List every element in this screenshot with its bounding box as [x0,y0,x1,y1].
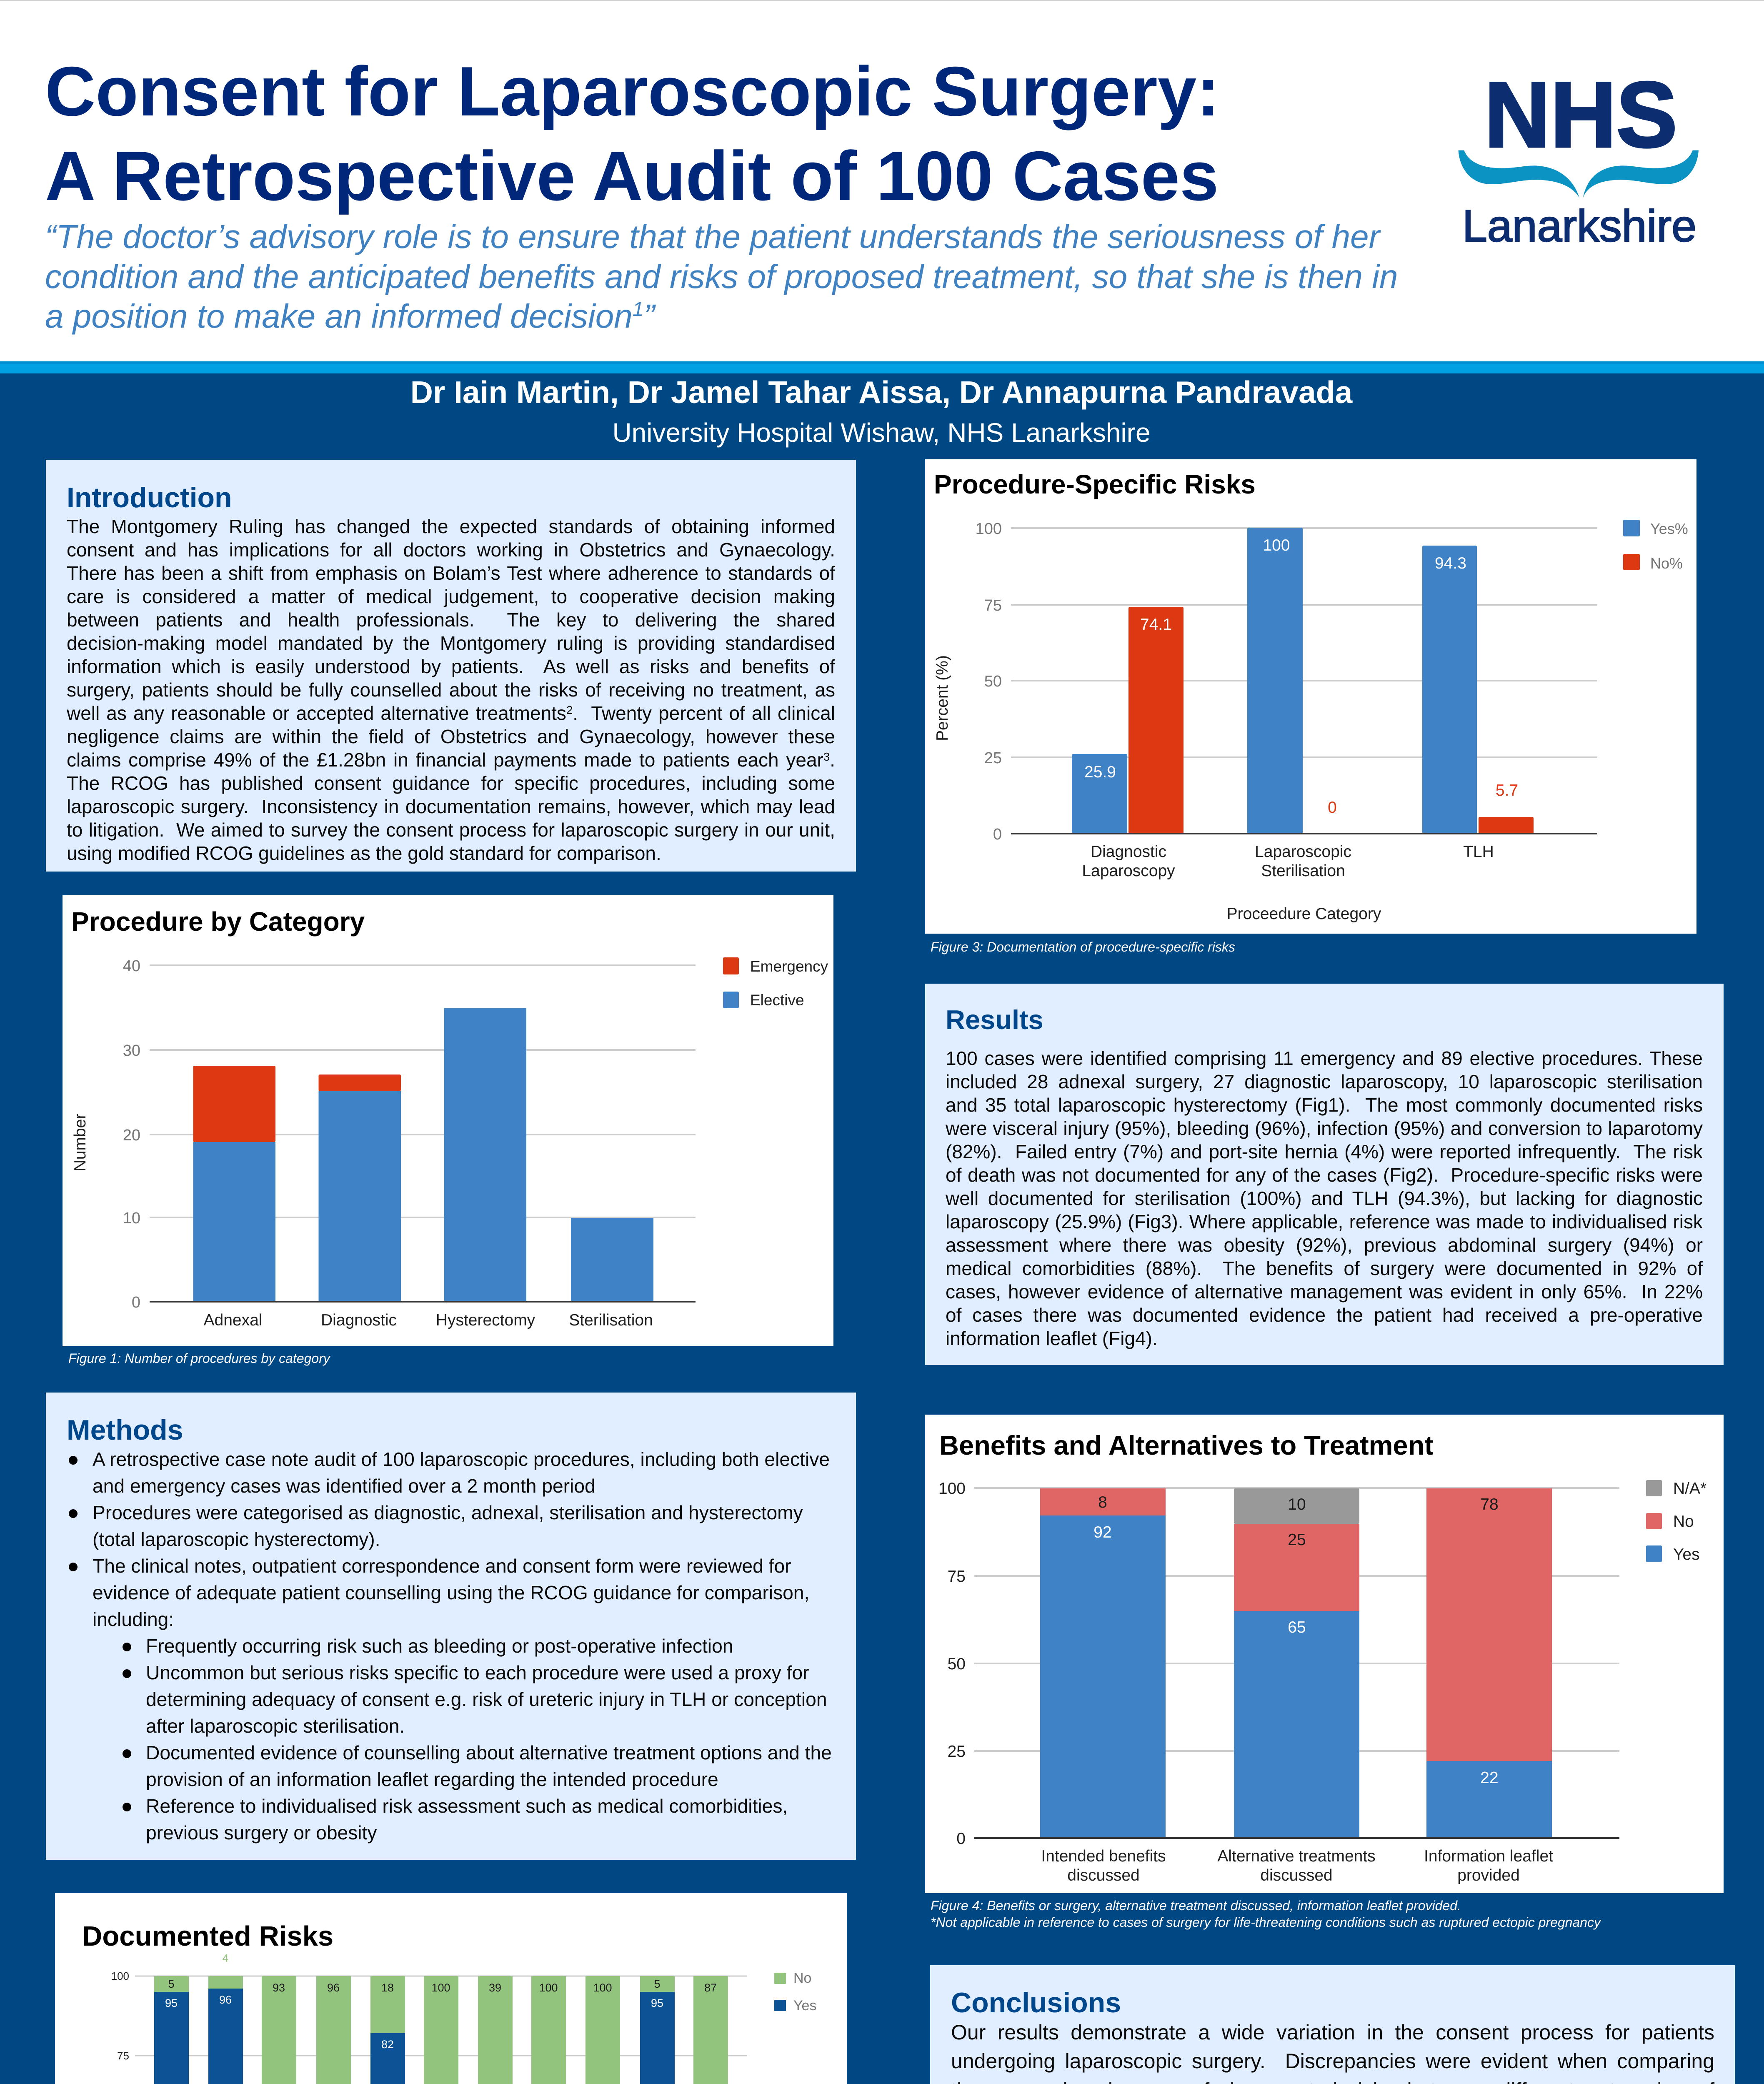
panel: procedure-specific risks chart (Figure 3) [925,459,1696,934]
y axis labels [938,1480,966,1848]
x axis labels: TLH [1463,843,1494,861]
x axis labels: Laparoscopic [1255,843,1351,861]
text: methods bullet list: including: [93,1608,174,1630]
legend [1646,1480,1706,1563]
data labels: 100 [1263,536,1290,554]
data labels [165,1952,717,2084]
x axis labels: discussed [1260,1866,1333,1884]
data labels [1093,1493,1499,1787]
x axis labels: provided [1457,1866,1520,1884]
data labels: 22 [1480,1769,1499,1787]
heading: methods: Methods [67,1414,183,1446]
caption: figure 3: Figure 3: Documentation of procedure-specific risks [931,939,1235,954]
data labels: 4 [222,1952,229,1964]
legend: Yes [1673,1545,1700,1563]
y axis labels: 100 [111,1970,129,1982]
text: methods bullet list: Uncommon but serious risks specific to each procedure were used a proxy for [146,1662,809,1683]
y axis labels: 75 [984,597,1002,614]
data labels: 100 [431,1981,450,1994]
text: results body: medical comorbidities (88%). The benefits of surgery were documented in 92% of [946,1257,1703,1279]
text: introduction body: laparoscopic surgery. Inconsistency in documentation remains, however, which may lead [67,796,835,817]
data labels: 25.9 [1084,763,1116,781]
text: results body: laparoscopy (25.9%) (Fig3). Where applicable, reference was made to individualised risk [946,1211,1703,1232]
text: introduction body: between patients and health professionals. The key to delivering the shared [67,609,835,631]
text: results body: well documented for sterilisation (100%) and TLH (94.3%), but lacking for diagnostic [946,1187,1703,1209]
heading: conclusions: Conclusions [951,1987,1121,2019]
panel: documented risks chart (Figure 2) [55,1893,847,2084]
data labels: 96 [327,1981,340,1994]
y axis title: Number [71,1114,89,1171]
text: introduction body: using modified RCOG guidelines as the gold standard for comparison. [67,842,661,864]
text: introduction body: The RCOG has published consent guidance for specific procedures, including some [67,772,835,794]
legend: N/A* [1673,1480,1706,1498]
chart heading: Documented Risks [82,1921,333,1952]
x axis labels: Intended benefits [1041,1847,1166,1865]
affiliation: University Hospital Wishaw, NHS Lanarkshire [612,418,1151,448]
y axis labels: 0 [132,1294,140,1311]
quotation: ” [643,298,656,335]
x axis labels: Diagnostic [1091,843,1166,861]
panel: procedure by category chart (Figure 1) [63,895,833,1346]
data labels: 78 [1480,1495,1499,1513]
x axis labels [1041,1847,1553,1884]
text: results body: were visceral injury (95%), bleeding (96%), infection (95%) and conversion to laparotomy [946,1117,1703,1139]
text: methods bullet list: A retrospective case note audit of 100 laparoscopic procedures, including both elective [93,1448,830,1470]
y axis labels [111,1970,129,2084]
caption: figure 1: Figure 1: Number of procedures by category [68,1351,331,1366]
logo: NHS Lanarkshire: Lanarkshire [1462,200,1696,251]
text: methods bullet list: Frequently occurring risk such as bleeding or post-operative infection [146,1635,733,1657]
legend: Yes% [1650,520,1688,537]
quotation [45,218,1398,335]
x axis labels [1082,843,1494,880]
legend [774,1970,816,2014]
y axis labels: 50 [984,673,1002,690]
data labels: 8 [1098,1493,1107,1511]
x axis title: Proceedure Category [1227,905,1381,923]
data labels: 5.7 [1496,782,1518,799]
text: introduction body: care is considered a matter of medical judgement, to cooperative decision making [67,586,835,607]
text: results body: included 28 adnexal surgery, 27 diagnostic laparoscopy, 10 laparoscopic sterilisation [946,1071,1703,1092]
y axis labels: 75 [948,1568,966,1586]
logo: NHS Lanarkshire: NHS [1484,63,1677,167]
logo: NHS Lanarkshire [1458,63,1699,251]
panel: benefits and alternatives chart (Figure 4) [925,1415,1724,1893]
text: results body: and 35 total laparoscopic hysterectomy (Fig1). The most commonly documented risks [946,1094,1703,1116]
x axis labels: Diagnostic [321,1311,397,1329]
x axis labels: Alternative treatments [1217,1847,1376,1865]
data labels: 96 [219,1994,232,2006]
text: methods bullet list: evidence of adequate patient counselling using the RCOG guidance for comparison, [93,1582,809,1603]
data labels: 100 [539,1981,558,1994]
data labels: 39 [489,1981,501,1994]
y axis labels: 40 [123,957,140,975]
text: results body: 100 cases were identified comprising 11 emergency and 89 elective procedures. These [946,1047,1703,1069]
text: results body: of death was not documented for any of the cases (Fig2). Procedure-specific risks were [946,1164,1703,1186]
legend: Emergency [750,958,828,975]
data labels: 5 [168,1978,175,1990]
text: methods bullet list: Reference to individualised risk assessment such as medical comorbidities, [146,1795,788,1817]
y axis labels [976,520,1002,843]
data labels: 18 [381,1981,394,1994]
data labels: 10 [1288,1495,1306,1513]
legend: Elective [750,992,804,1009]
y axis labels: 100 [976,520,1002,538]
heading: results: Results [946,1004,1043,1035]
text: methods bullet list: previous surgery or obesity [146,1822,377,1844]
text: results body: cases, however evidence of alternative management was evident in only 65%. In 22% [946,1281,1703,1302]
heading: introduction: Introduction [67,482,232,513]
x axis labels: Sterilisation [569,1311,653,1329]
text: introduction body [67,515,835,865]
x axis labels: Hysterectomy [436,1311,535,1329]
y axis labels: 75 [117,2049,129,2062]
legend [723,957,828,1009]
y axis title: Percent (%) [933,655,951,741]
panel: conclusions [930,1965,1735,2084]
data labels: 25 [1288,1531,1306,1549]
data labels [1084,536,1518,817]
legend: Yes [793,1998,816,2014]
stacked bars [1040,1488,1552,1838]
quotation: 1 [633,298,643,321]
legend: No [793,1970,811,1986]
data labels: 5 [654,1978,661,1990]
title: A Retrospective Audit of 100 Cases [45,137,1219,215]
stacked bars [193,1008,653,1302]
text: methods bullet list: and emergency cases was identified over a 2 month period [93,1475,596,1497]
x axis labels: discussed [1067,1866,1140,1884]
text: introduction body: The Montgomery Ruling has changed the expected standards of obtaining informed [67,516,835,537]
text: conclusions body: undergoing laparoscopic surgery. Discrepancies were evident when comparing [951,2049,1714,2073]
x axis labels: Information leaflet [1424,1847,1553,1865]
y axis labels: 20 [123,1127,140,1144]
y axis labels: 50 [948,1655,966,1673]
caption: figure 4 [931,1898,1601,1930]
caption: figure 4: *Not applicable in reference to cases of surgery for life-threatening conditions such as ruptured ectopic pregnancy [931,1915,1601,1930]
text: introduction body: claims comprise 49% of the £1.28bn in financial payments made to patients each year3. [67,749,835,771]
panel: results [925,984,1724,1365]
authors: Dr Iain Martin, Dr Jamel Tahar Aissa, Dr Annapurna Pandravada [410,375,1353,410]
text: methods bullet list: Procedures were categorised as diagnostic, adnexal, sterilisation and hysterectomy [93,1502,803,1523]
y axis labels: 30 [123,1042,140,1060]
panel: introduction [46,460,856,872]
text: methods bullet list: after laparoscopic sterilisation. [146,1715,405,1737]
panel: methods [46,1393,856,1860]
text: results body: information leaflet (Fig4). [946,1328,1158,1349]
text: introduction body: consent and has implications for all doctors working in Obstetrics and Gynaecology. [67,539,835,561]
data labels: 95 [165,1997,178,2009]
text: methods bullet list: Documented evidence of counselling about alternative treatment options and the [146,1742,832,1763]
data labels: 93 [273,1981,285,1994]
data labels: 0 [1328,799,1337,817]
data labels: 100 [593,1981,612,1994]
quotation: condition and the anticipated benefits and risks of proposed treatment, so that she is then in [45,258,1398,295]
data labels: 94.3 [1435,554,1466,572]
text: results body: of cases there was documented evidence the patient had received a pre-operative [946,1304,1703,1326]
data labels: 65 [1288,1618,1306,1636]
data labels: 92 [1093,1523,1112,1541]
text: introduction body: information which is easily understood by patients. As well as risks and benefits of [67,656,835,677]
quotation: “The doctor’s advisory role is to ensure that the patient understands the seriousness of her [45,218,1381,255]
legend: No [1673,1513,1694,1530]
x axis labels [204,1311,653,1329]
y axis labels: 0 [993,826,1002,843]
text: introduction body: negligence claims are within the field of Obstetrics and Gynaecology, however these [67,726,835,747]
y axis labels: 10 [123,1210,140,1227]
caption: figure 4: Figure 4: Benefits or surgery, alternative treatment discussed, information leaflet provided. [931,1898,1461,1913]
text: introduction body: decision-making model mandated by the Montgomery ruling is providing standardised [67,632,835,654]
text: methods bullet list [46,1446,856,1846]
text: introduction body: surgery, patients should be fully counselled about the risks of receiving no treatment, as [67,679,835,701]
text: methods bullet list: The clinical notes, outpatient correspondence and consent form were reviewed for [93,1555,791,1577]
y axis labels: 100 [938,1480,966,1498]
x axis labels: Adnexal [204,1311,262,1329]
text: introduction body: well as any reasonable or accepted alternative treatments2. Twenty percent of all clinical [67,702,835,724]
legend [1623,520,1688,572]
quotation: a position to make an informed decision [45,298,633,335]
text: results body: assessment where there was obesity (92%), previous abdominal surgery (94%) or [946,1234,1703,1256]
y axis labels [123,957,140,1311]
chart heading: Procedure-Specific Risks [934,469,1256,499]
y axis labels: 0 [956,1830,966,1848]
data labels: 87 [704,1981,717,1994]
data labels: 95 [651,1997,663,2009]
text: results body [946,1047,1703,1350]
chart heading: Benefits and Alternatives to Treatment [939,1430,1434,1460]
legend: No% [1650,555,1683,572]
text: conclusions body: Our results demonstrate a wide variation in the consent process for patients [951,2021,1714,2044]
y axis labels: 25 [984,749,1002,767]
x axis labels: Sterilisation [1261,862,1345,880]
data labels: 74.1 [1140,616,1172,634]
text: conclusions body [951,2018,1714,2084]
text: methods bullet list: determining adequacy of consent e.g. risk of ureteric injury in TLH or conception [146,1688,827,1710]
stacked bars: yes and no [154,1976,728,2084]
text: methods bullet list: (total laparoscopic hysterectomy). [93,1528,380,1550]
x axis labels: Laparoscopy [1082,862,1175,880]
text: methods bullet list: provision of an information leaflet regarding the intended procedure [146,1768,718,1790]
text: results body: (82%). Failed entry (7%) and port-site hernia (4%) were reported infrequently. The risk [946,1141,1703,1162]
data labels: 82 [381,2038,394,2051]
grouped bars [1072,528,1534,834]
text: introduction body: to litigation. We aimed to survey the consent process for laparoscopic surgery in our unit, [67,819,835,841]
chart heading: Procedure by Category [71,907,365,937]
text: introduction body: There has been a shift from emphasis on Bolam’s Test where adherence to standards of [67,562,835,584]
title [45,52,1220,215]
title: Consent for Laparoscopic Surgery: [45,52,1220,130]
y axis labels: 25 [948,1743,966,1761]
